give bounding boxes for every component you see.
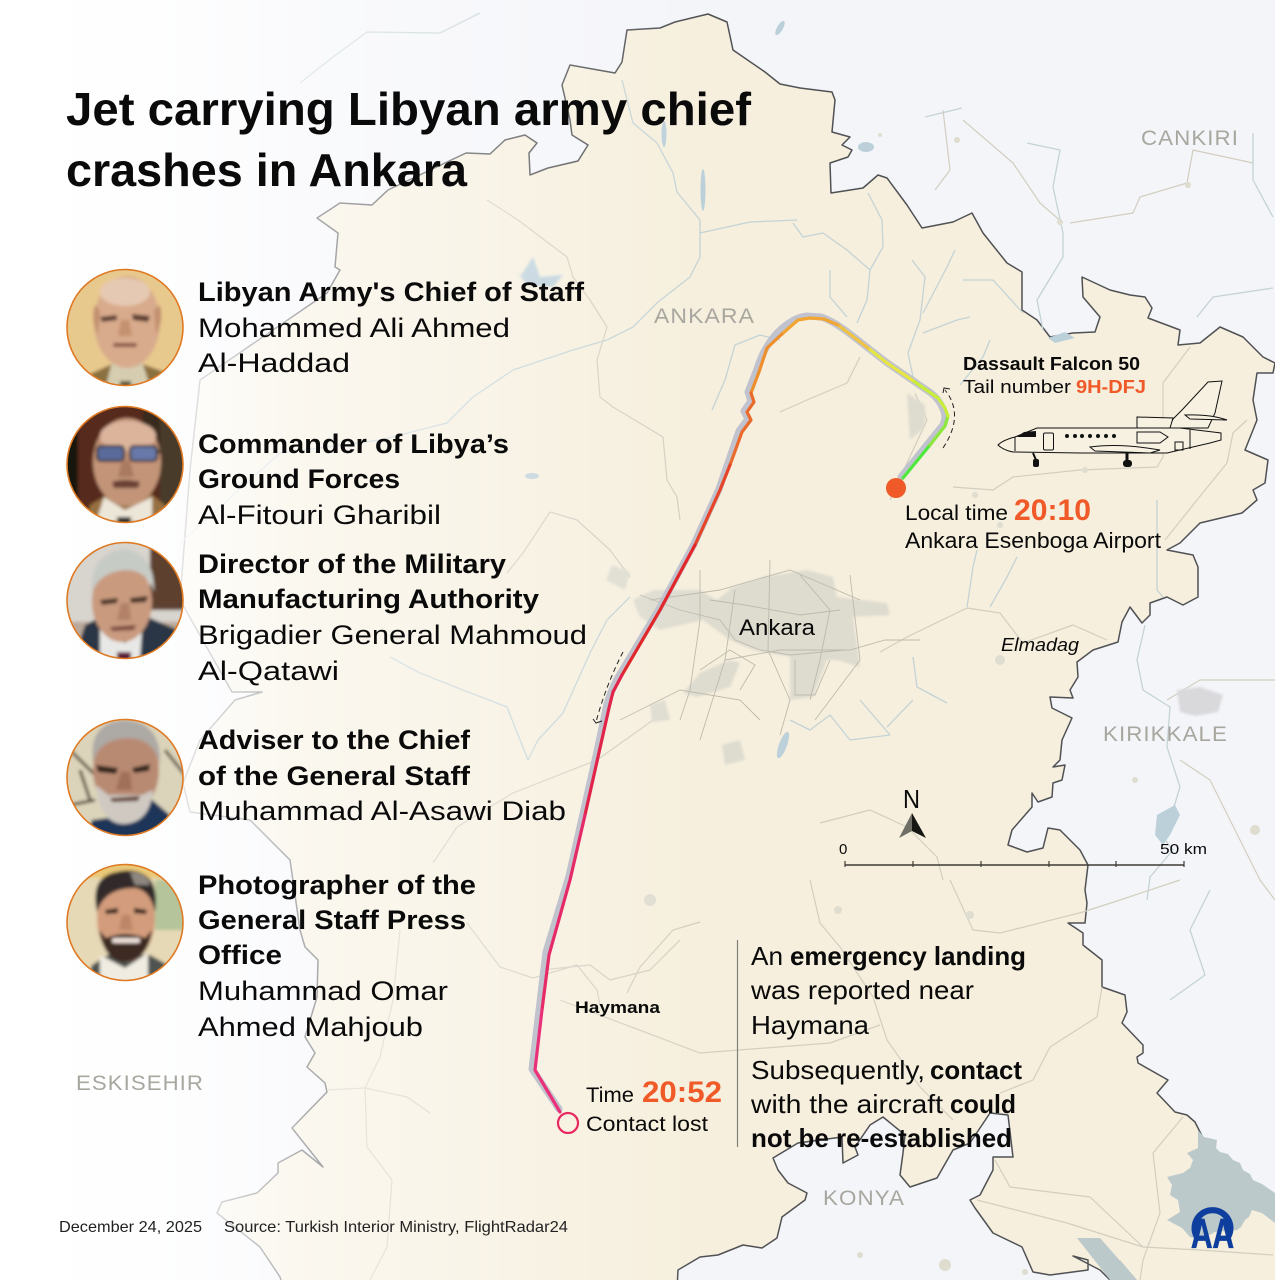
province labels: KONYA [823, 1187, 905, 1210]
callout: emergency landing: An [751, 941, 783, 971]
label: Elmadag: Elmadag [1001, 635, 1079, 655]
callout: emergency landing: with the aircraft [750, 1089, 944, 1119]
icon: north arrow: N [903, 784, 920, 814]
text: aircraft details: 9H-DFJ [1076, 376, 1146, 397]
text: contact lost: Contact lost [586, 1113, 708, 1136]
text: Al-Qatawi: Director of the Military [198, 549, 506, 579]
text: contact lost: Time [586, 1084, 634, 1107]
icon: Anadolu Agency logo [1191, 1207, 1234, 1257]
text: Al-Haddad: Mohammed Ali Ahmed [198, 313, 510, 343]
portrait: Diab [66, 718, 184, 836]
province labels: KIRIKKALE [1103, 723, 1228, 746]
text: Mahjoub [198, 870, 476, 1042]
map: Ankara city area [606, 393, 925, 765]
map: Tuz lake [1077, 1130, 1275, 1280]
province labels: CANKIRI [1141, 127, 1239, 150]
portrait: Al-Qatawi [66, 542, 184, 660]
scale bar: 0 [839, 841, 847, 858]
text: Diab: Adviser to the Chief [198, 725, 471, 755]
icon: Dassault Falcon 50 aircraft [998, 381, 1227, 467]
province labels [76, 127, 1239, 1210]
arrow: flight direction [593, 652, 623, 723]
text: Al-Haddad: Al-Haddad [198, 348, 350, 378]
text: departure: Ankara Esenboga Airport [905, 528, 1161, 553]
title [66, 83, 752, 196]
text: Gharibil: Ground Forces [198, 464, 400, 494]
map: roads [327, 110, 1275, 1280]
text: Mahjoub: Photographer of the [198, 870, 476, 900]
text: contact lost [586, 1076, 722, 1136]
callout: emergency landing: could [950, 1089, 1016, 1119]
text: Mahjoub: Office [198, 940, 282, 970]
province labels: ESKISEHIR [76, 1072, 204, 1095]
icon: north arrow [899, 784, 926, 838]
text: departure: 20:10 [1014, 494, 1091, 527]
text: aircraft details: Dassault Falcon 50 [963, 353, 1140, 374]
text: departure [905, 494, 1161, 553]
title: crashes in Ankara [66, 144, 467, 196]
text: Mahjoub: General Staff Press [198, 905, 466, 935]
footer: date and source: December 24, 2025 [59, 1219, 202, 1236]
flight path [532, 316, 948, 1112]
footer: date and source: Source: Turkish Interior Ministry, FlightRadar24 [224, 1219, 568, 1236]
text: Gharibil: Commander of Libya’s [198, 429, 509, 459]
text: contact lost: 20:52 [642, 1076, 722, 1109]
callout: emergency landing: contact [930, 1055, 1022, 1085]
text: Gharibil: Al-Fitouri Gharibil [198, 500, 441, 530]
text: Diab: Muhammad Al-Asawi Diab [198, 796, 566, 826]
title: Jet carrying Libyan army chief [66, 83, 752, 135]
text: Mahjoub: Muhammad Omar [198, 976, 448, 1006]
text: Gharibil [198, 429, 509, 530]
portrait: Mahjoub [66, 864, 184, 982]
callout: emergency landing: Subsequently, [751, 1055, 925, 1085]
map: towns [644, 133, 1260, 1275]
callout: emergency landing: not be re-established [751, 1123, 1012, 1153]
portrait: Gharibil [66, 406, 184, 524]
text: Al-Qatawi: Brigadier General Mahmoud [198, 620, 587, 650]
text: Al-Haddad: Libyan Army's Chief of Staff [198, 277, 585, 307]
province labels: ANKARA [654, 305, 755, 328]
end point: contact lost [558, 1113, 578, 1133]
text: Mahjoub: Ahmed Mahjoub [198, 1012, 423, 1042]
text: Al-Qatawi: Manufacturing Authority [198, 584, 539, 614]
callout: emergency landing [738, 940, 1026, 1153]
text: Al-Qatawi [198, 549, 587, 686]
callout: emergency landing: emergency landing [790, 941, 1026, 971]
text: departure: Local time [905, 502, 1008, 525]
label: Ankara city: Ankara [739, 615, 816, 640]
label: Haymana: Haymana [575, 998, 661, 1017]
scale bar: 50 km [1160, 841, 1207, 858]
text: Al-Haddad [198, 277, 585, 378]
callout: emergency landing: was reported near [750, 975, 974, 1005]
text: Diab [198, 725, 566, 826]
map: rivers [180, 13, 1273, 1000]
arrow: departure direction [943, 388, 955, 448]
icon: Anadolu Agency logo: AA [1191, 1210, 1234, 1257]
text: aircraft details: Tail number [963, 376, 1071, 397]
text: Al-Qatawi: Al-Qatawi [198, 656, 339, 686]
map: Kirikkale city [1177, 687, 1223, 716]
scale bar [839, 841, 1207, 867]
portrait: Al-Haddad [66, 268, 184, 386]
footer: date and source [59, 1219, 568, 1236]
text: Diab: of the General Staff [198, 761, 471, 791]
start point: airport [886, 478, 906, 498]
text: aircraft details [963, 353, 1146, 397]
callout: emergency landing: Haymana [751, 1010, 870, 1040]
